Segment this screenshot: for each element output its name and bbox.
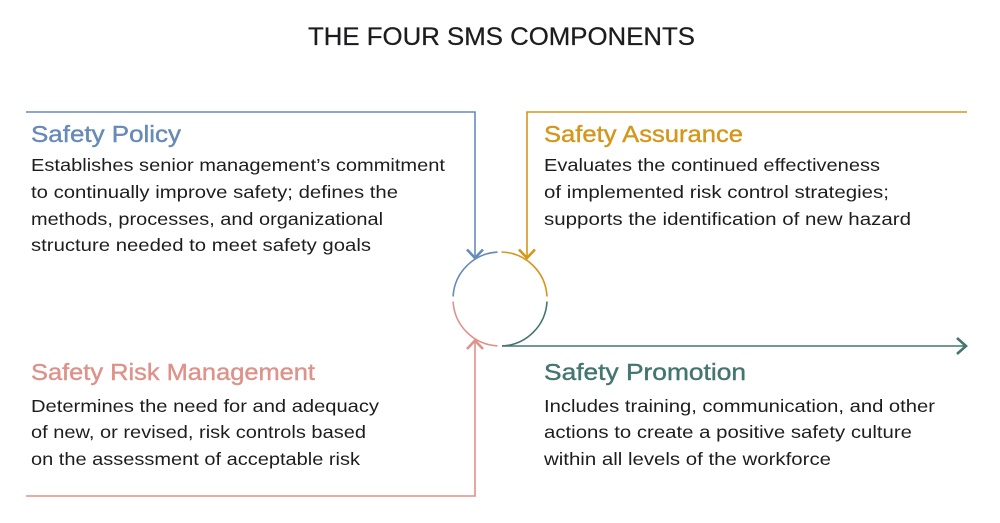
text block: safety risk management description: of new, or revised, risk controls based — [31, 422, 366, 442]
arrow: safety policy into cycle — [26, 112, 483, 258]
text block: safety promotion description — [543, 396, 935, 469]
heading: safety risk management: Safety Risk Management — [31, 359, 316, 385]
heading: safety promotion: Safety Promotion — [544, 359, 746, 385]
panel: safety promotion — [543, 359, 935, 469]
text block: safety promotion description: within all levels of the workforce — [543, 449, 831, 469]
panel: safety policy — [31, 121, 445, 255]
arrow: safety assurance into cycle — [519, 112, 967, 258]
cycle circle — [453, 252, 547, 346]
text block: safety policy description: to continually improve safety; defines the — [31, 182, 398, 202]
text block: safety assurance description: of implemented risk control strategies; — [544, 182, 889, 202]
arc: safety risk management — [453, 302, 498, 346]
text block: safety assurance description: supports the identification of new hazard — [544, 209, 911, 229]
text block: safety risk management description — [31, 396, 379, 469]
arc: safety assurance — [502, 252, 547, 296]
text block: safety risk management description: Determines the need for and adequacy — [31, 396, 379, 416]
text block: safety promotion description: actions to create a positive safety culture — [544, 422, 912, 442]
panel: safety assurance — [544, 121, 911, 229]
arrow: safety risk management into cycle — [26, 340, 483, 496]
text block: safety policy description: Establishes senior management’s commitment — [31, 155, 445, 175]
text block: safety policy description: structure needed to meet safety goals — [31, 235, 371, 255]
arc: safety promotion — [502, 302, 547, 346]
text block: safety risk management description: on the assessment of acceptable risk — [31, 449, 360, 469]
arc: safety policy — [453, 252, 498, 296]
text block: safety promotion description: Includes training, communication, and other — [544, 396, 935, 416]
text block: safety assurance description — [544, 155, 911, 229]
panel: safety risk management — [31, 359, 379, 469]
arrow: safety promotion out of cycle — [502, 338, 966, 354]
text block: safety policy description — [31, 155, 445, 255]
heading: safety assurance: Safety Assurance — [544, 121, 743, 147]
heading: safety policy: Safety Policy — [31, 121, 182, 147]
text block: safety assurance description: Evaluates the continued effectiveness — [544, 155, 880, 175]
text block: safety policy description: methods, processes, and organizational — [31, 209, 383, 229]
title: THE FOUR SMS COMPONENTS — [308, 23, 695, 51]
